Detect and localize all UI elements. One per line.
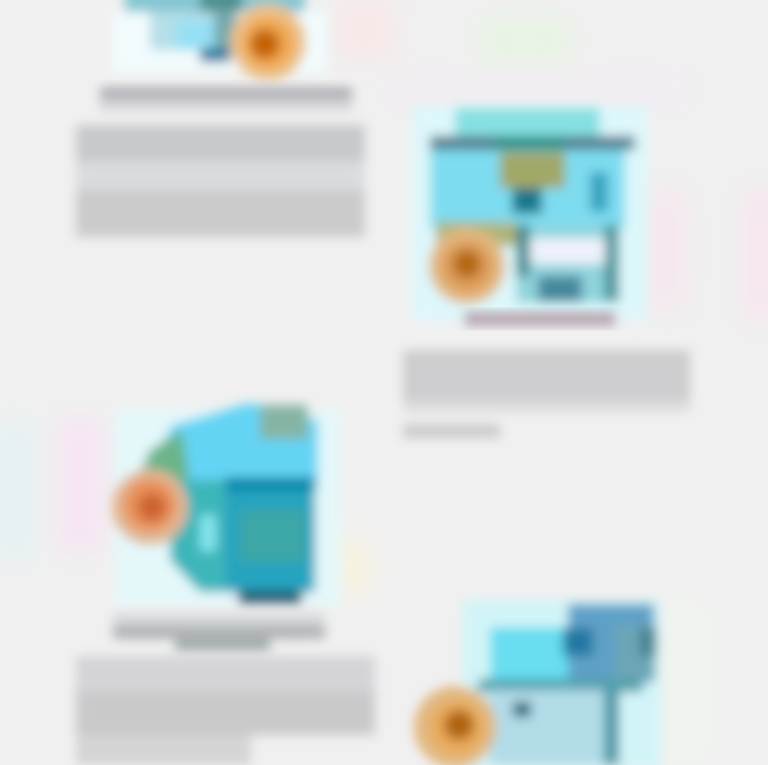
heading: bottom left title [113,613,325,652]
panel: top left item [76,0,365,237]
panel: right middle item [403,105,690,438]
heading: right middle title [465,312,615,326]
text block: bottom left paragraph [76,656,375,765]
heading: top left title [100,87,352,111]
text block: top left paragraph [76,125,365,237]
icon: bottom left building with orange badge [112,403,340,605]
icon: bottom right building with orange badge [414,600,660,765]
icon: right middle building with orange badge [412,105,647,320]
text block: right middle paragraph [403,350,690,438]
panel: bottom right item [414,600,660,765]
panel: bottom left item [76,403,375,765]
icon: top left building with orange badge [112,0,327,80]
